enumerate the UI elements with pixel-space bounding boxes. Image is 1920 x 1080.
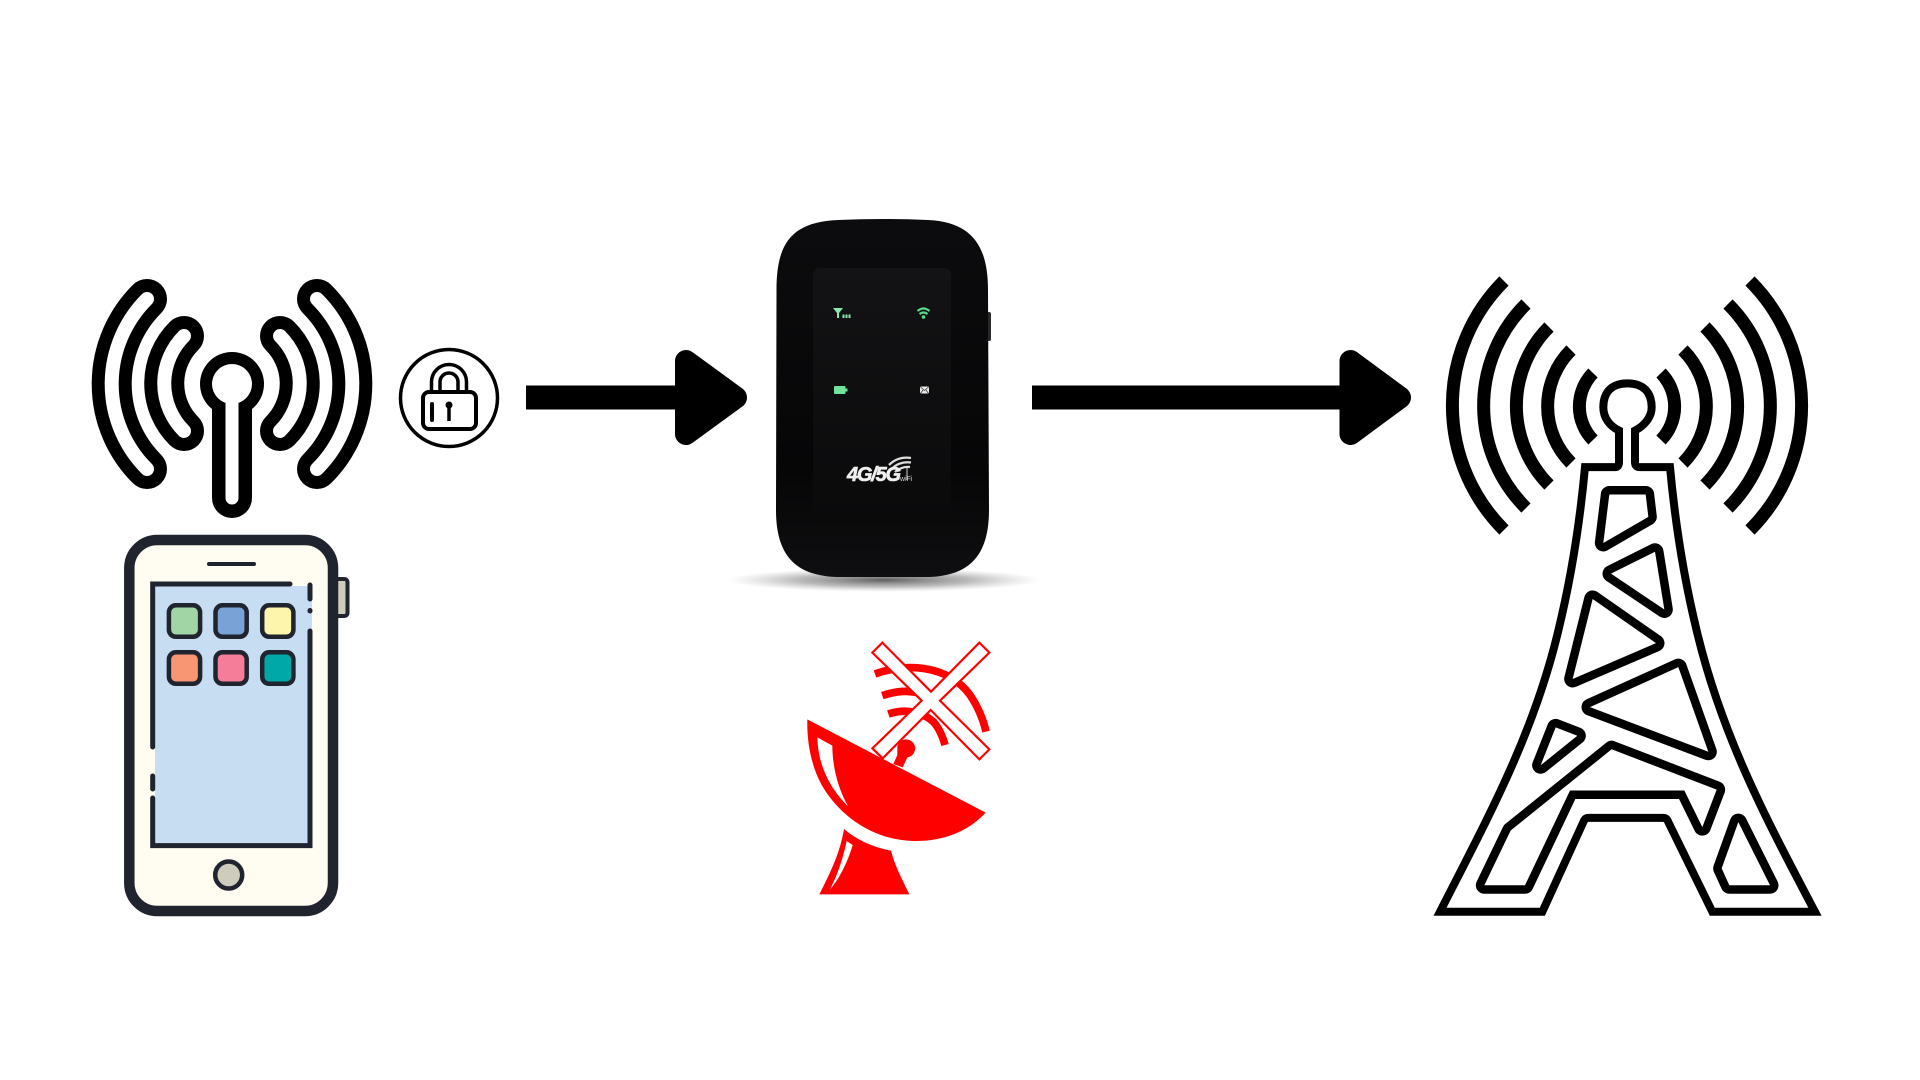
shadow (726, 568, 1042, 592)
logo: 4G/5G wifi: wiFi (899, 476, 913, 483)
signal waves (875, 668, 986, 745)
router body (776, 219, 989, 577)
stand (819, 829, 909, 894)
phone body (129, 540, 333, 911)
display panel (813, 268, 951, 523)
icon: smartphone (129, 540, 348, 911)
dish (807, 719, 986, 841)
feed horn (893, 739, 915, 767)
side button (986, 312, 991, 341)
broadcast waves (1452, 281, 1802, 530)
stand highlight (830, 841, 853, 889)
side button (335, 579, 348, 616)
tower frame (1440, 383, 1815, 912)
icon: cell tower (1440, 281, 1815, 912)
speaker (209, 562, 254, 566)
cross mark (872, 643, 989, 759)
status icon: wifi (918, 308, 930, 319)
icon: padlock in circle (400, 350, 498, 446)
arrow: phone to router (526, 361, 736, 434)
home button (215, 862, 242, 888)
status icon: battery (834, 386, 848, 394)
status icon: signal (833, 308, 850, 318)
photo: mobile 4G/5G WiFi router (726, 219, 1042, 592)
dish highlight (817, 737, 848, 807)
logo: 4G/5G wifi (846, 458, 913, 486)
arrow: router to tower (1032, 361, 1400, 434)
app icons (169, 605, 293, 684)
icon: satellite dish crossed out (807, 643, 989, 894)
status icon: message (920, 386, 929, 394)
logo: 4G/5G wifi: 4G/5G (846, 464, 901, 486)
icon: signal antenna (112, 299, 352, 498)
screen (153, 584, 312, 846)
